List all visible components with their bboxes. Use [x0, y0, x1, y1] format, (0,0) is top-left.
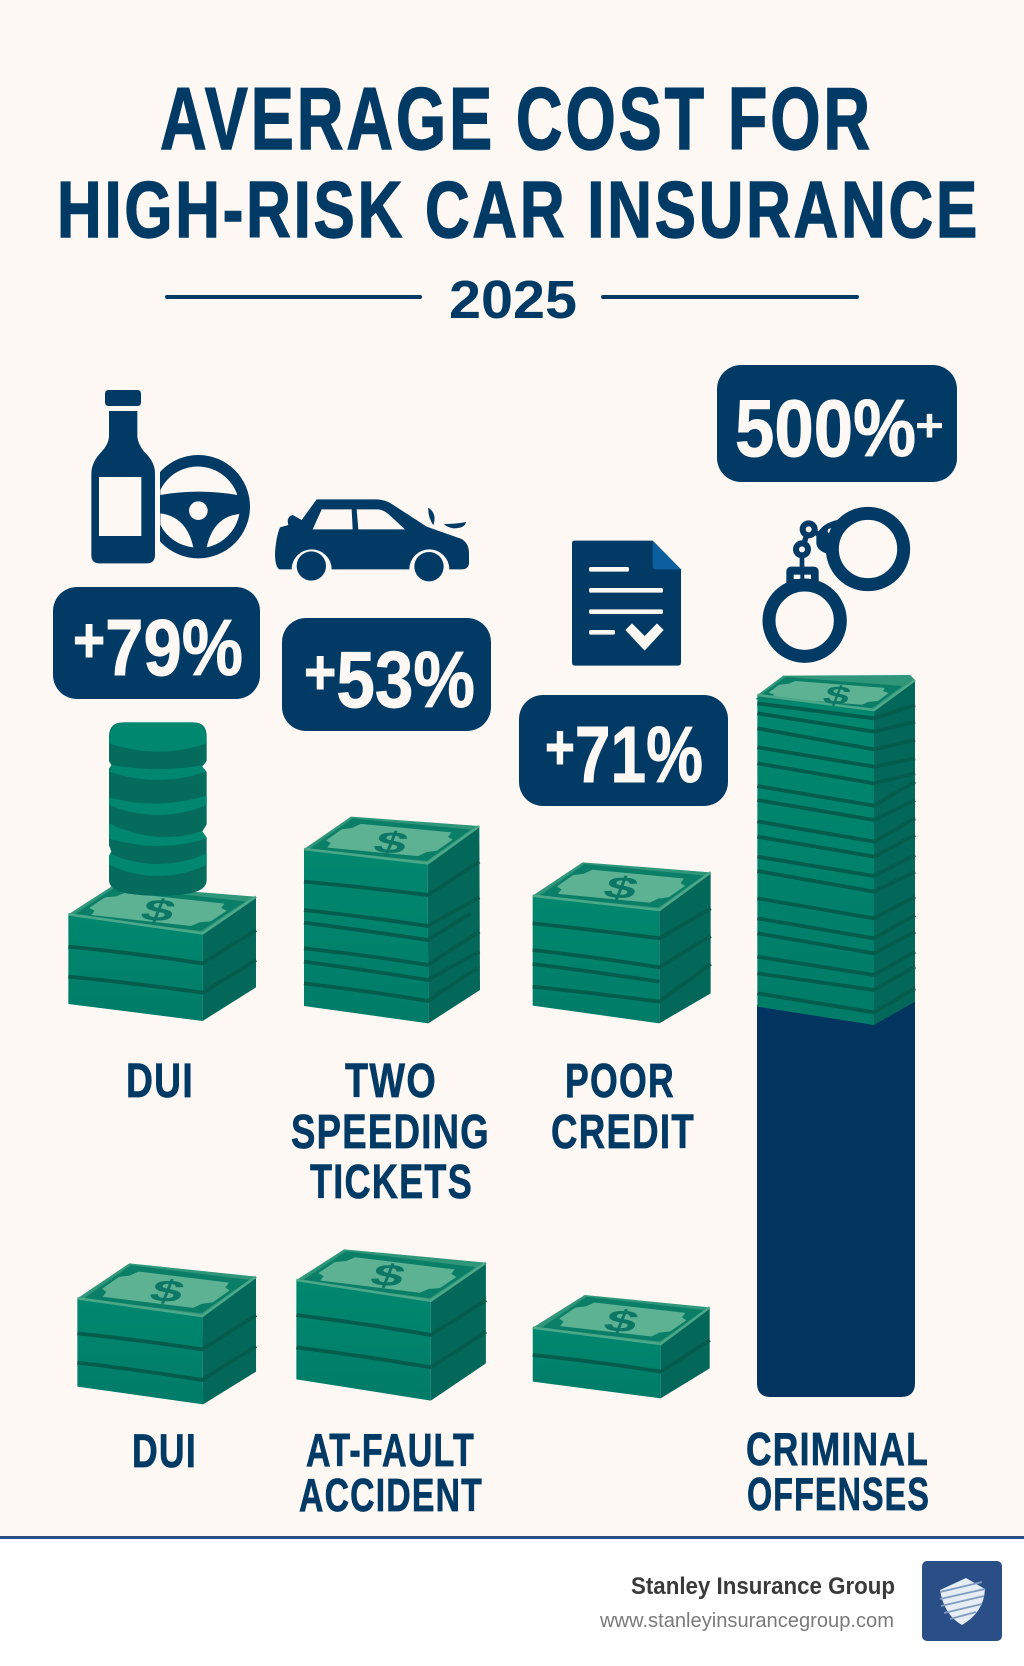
footer company name: Stanley Insurance Group: [631, 1573, 895, 1600]
label: at-fault accident: [299, 1424, 483, 1521]
icon: shield logo: [922, 1561, 1002, 1641]
icon: crashed car: [275, 499, 469, 581]
label: DUI upper: DUI: [126, 1055, 194, 1108]
label: two speeding tickets: TWO: [345, 1055, 437, 1108]
badge: +79%: +: [73, 604, 105, 676]
label: at-fault accident: ACCIDENT: [299, 1469, 483, 1521]
money stack: two speeding tickets: [304, 817, 480, 1023]
money stack: lower small: [533, 1295, 710, 1398]
badge: +79%: [53, 587, 260, 699]
money stack: lower DUI: [77, 1263, 256, 1404]
badge: 500%+: +: [915, 399, 944, 451]
label: two speeding tickets: SPEEDING: [291, 1106, 490, 1159]
label: criminal offenses: OFFENSES: [747, 1468, 930, 1520]
label: at-fault accident: AT-FAULT: [306, 1424, 475, 1476]
title: [57, 69, 980, 254]
money stack: poor credit: [533, 862, 711, 1023]
icon: handcuffs: [769, 513, 904, 656]
badge: +53%: +: [304, 636, 336, 708]
badge: +53%: [282, 618, 491, 731]
money stack: at-fault accident: $: [366, 1258, 411, 1293]
icon: credit document: [572, 541, 681, 666]
label: two speeding tickets: TICKETS: [310, 1156, 473, 1209]
money stack: criminal offenses: $: [819, 680, 856, 710]
money stack: at-fault accident: [296, 1249, 486, 1401]
footer: [0, 1536, 1024, 1666]
label: poor credit: CREDIT: [551, 1106, 695, 1159]
badge: +71%: +: [545, 711, 575, 783]
label: poor credit: [551, 1055, 695, 1159]
money stack: poor credit: $: [599, 870, 644, 905]
money stack: lower DUI: $: [145, 1273, 190, 1309]
coin stack: [108, 722, 207, 896]
money stack: DUI upper: $: [136, 893, 181, 928]
label: criminal offenses: CRIMINAL: [746, 1423, 929, 1475]
badge: 500%+: [717, 365, 957, 482]
label: two speeding tickets: [291, 1055, 490, 1209]
money stack: DUI upper: [68, 885, 256, 1021]
badge: 500%+: 500%: [735, 384, 916, 474]
money stack: criminal offenses: [756, 675, 915, 1025]
badge: +53%: 53%: [336, 635, 475, 724]
navy bar: criminal offenses: [757, 998, 915, 1397]
icon: bottle and steering wheel: [91, 390, 250, 563]
money stack: two speeding tickets: $: [369, 825, 414, 860]
year heading: [165, 270, 859, 330]
label: criminal offenses: [746, 1423, 930, 1520]
money stack: lower small: $: [599, 1303, 644, 1339]
label: DUI lower: DUI: [132, 1424, 197, 1477]
year heading: 2025: [449, 270, 577, 330]
badge: +71%: 71%: [575, 710, 703, 799]
badge: +71%: [519, 695, 728, 806]
label: poor credit: POOR: [565, 1055, 675, 1108]
badge: +79%: 79%: [105, 603, 243, 692]
footer website: www.stanleyinsurancegroup.com: [599, 1610, 894, 1632]
